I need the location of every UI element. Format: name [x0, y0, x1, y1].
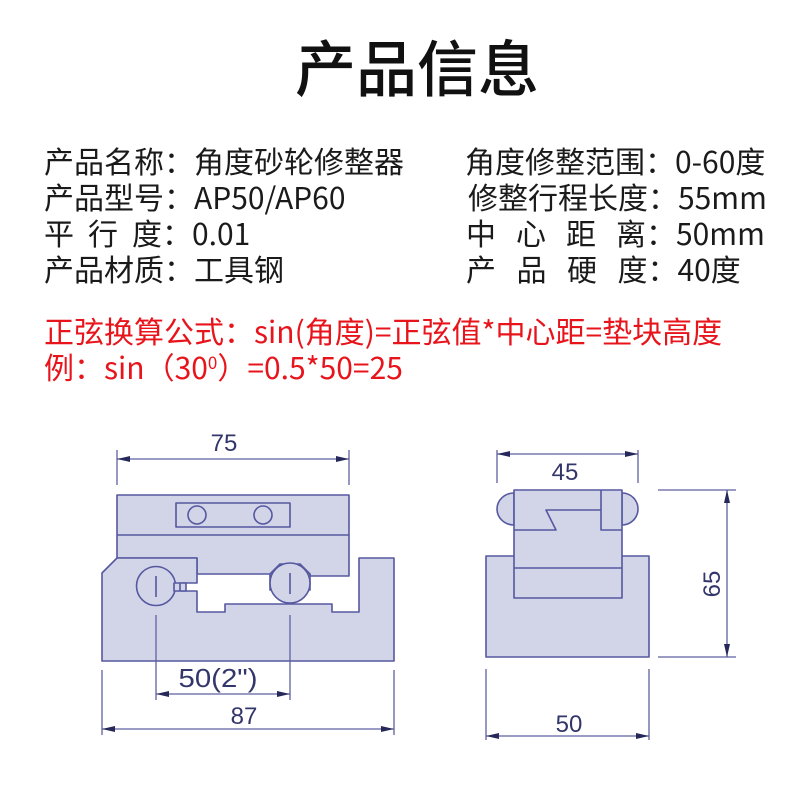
text block: specifications right: 角度修整范围：0-60度	[465, 138, 765, 182]
text block: sine formula	[44, 308, 722, 388]
dimension labels: side view: 65	[699, 571, 726, 597]
title: 产品信息	[295, 20, 539, 109]
dimension labels: front view: 50(2")	[178, 663, 258, 693]
top slide block	[117, 495, 349, 576]
text block: specifications left: 产品名称：角度砂轮修整器	[44, 138, 404, 182]
text block: specifications right: 产品硬度：40度	[466, 246, 741, 290]
dimension labels: front view: 87	[231, 703, 257, 730]
text block: specifications right: 中心距离：50mm	[466, 210, 765, 254]
right roller	[270, 564, 310, 590]
left roller	[136, 566, 176, 606]
text block: sine formula: 例：sin（300）=0.5*50=25	[44, 344, 403, 388]
text block: sine formula: 正弦换算公式：sin(角度)=正弦值*中心距=垫块高度	[44, 308, 722, 352]
side view drawing	[486, 490, 649, 657]
text block: specifications left: 产品型号：AP50/AP60	[44, 174, 345, 218]
base block	[102, 558, 394, 661]
text block: specifications left	[44, 138, 404, 290]
dimension labels: front view	[178, 430, 258, 730]
text block: specifications left: 产品材质：工具钢	[44, 246, 284, 290]
dimension labels: side view: 50	[556, 711, 582, 738]
side rollers	[497, 493, 514, 525]
dimension labels: side view	[552, 459, 726, 738]
text block: specifications right	[465, 138, 767, 290]
dimension lines: side view	[486, 450, 736, 740]
dimension labels: side view: 45	[552, 459, 578, 486]
upper block	[514, 490, 622, 598]
text block: specifications left: 平行度：0.01	[44, 210, 250, 254]
base block	[486, 556, 649, 657]
dimension lines: front view	[102, 450, 394, 735]
dimension labels: front view: 75	[211, 430, 237, 457]
text block: specifications right: 修整行程长度：55mm	[468, 174, 767, 218]
front view drawing	[102, 495, 394, 661]
